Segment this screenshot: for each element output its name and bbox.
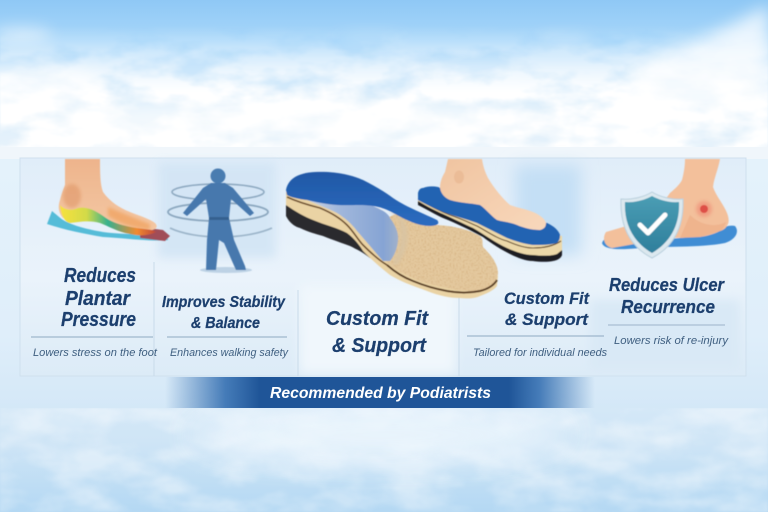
panel: reduces ulcer recurrence [602, 159, 737, 347]
icon: foot on blue insole [418, 159, 562, 262]
caption: Enhances walking safety [170, 347, 289, 359]
heading: Plantar [65, 288, 131, 310]
heading: & Support [332, 335, 427, 357]
heading: Reduces Ulcer [609, 275, 725, 295]
panel: reduces plantar pressure [31, 159, 170, 359]
heading: & Balance [191, 315, 260, 332]
heading: Custom Fit [326, 308, 429, 330]
panel: custom fit and support, foot on insole [418, 159, 607, 359]
icon: large cork and blue insole [286, 172, 498, 298]
caption: Tailored for individual needs [473, 347, 607, 359]
icon: standing man with balance rings [168, 168, 272, 273]
heading: Pressure [61, 309, 136, 331]
heading [162, 294, 286, 332]
heading: Recurrence [621, 297, 715, 317]
heading [326, 308, 429, 357]
heading: Custom Fit [504, 289, 590, 308]
sky background: top [0, 0, 768, 148]
caption: Lowers risk of re-injury [614, 335, 730, 347]
banner: recommended by podiatrists: Recommended by Podiatrists [270, 385, 491, 402]
heading: & Support [505, 310, 589, 329]
icon: heel with ulcer and shield [602, 159, 737, 258]
banner: recommended by podiatrists [165, 377, 595, 408]
panel: custom fit and support, large insole [286, 172, 498, 357]
caption: Lowers stress on the foot [33, 347, 158, 359]
heading [504, 289, 590, 329]
icon: foot on pressure map insole [47, 159, 170, 241]
heading [609, 275, 725, 317]
heading: Reduces [64, 265, 136, 287]
heading: Improves Stability [162, 294, 286, 311]
heading [61, 265, 136, 331]
sky background: bottom [0, 159, 768, 512]
white band behind panels [0, 147, 768, 159]
panel strip [20, 158, 746, 376]
panel: improves stability and balance [162, 168, 289, 359]
